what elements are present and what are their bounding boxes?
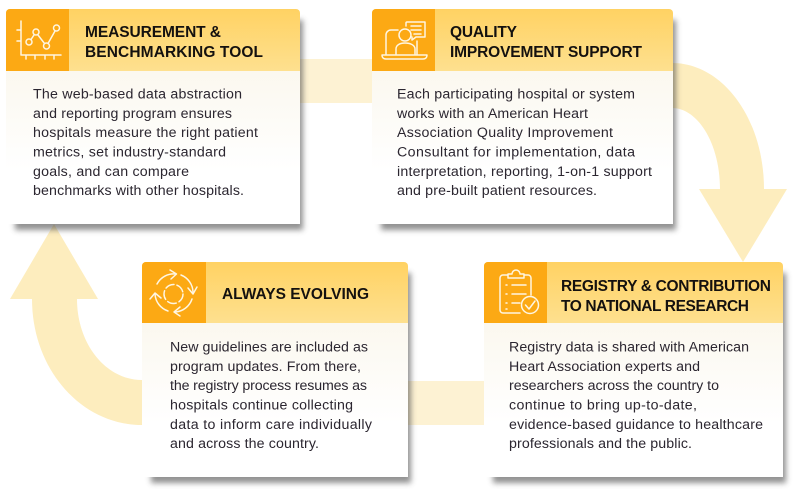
arrow: evolving to measurement <box>10 224 146 425</box>
body text: The web-based data abstraction <box>33 86 242 102</box>
panel: quality improvement support <box>372 9 676 230</box>
body text: benchmarks with other hospitals. <box>33 183 244 199</box>
body text: New guidelines are included as <box>170 340 368 356</box>
icon: line chart <box>6 9 69 71</box>
body text: metrics, set industry-standard <box>33 144 226 160</box>
body text: hospitals measure the right patient <box>33 125 258 141</box>
arrow: measurement to quality <box>295 59 375 103</box>
body text: Each participating hospital or system <box>397 86 635 102</box>
icon: circular arrows <box>142 262 206 323</box>
body text: and reporting program ensures <box>33 106 232 122</box>
header band <box>142 262 408 323</box>
heading: QUALITY <box>450 24 518 41</box>
body text: and pre-built patient resources. <box>397 183 597 199</box>
heading: TO NATIONAL RESEARCH <box>561 298 749 315</box>
body text: hospitals continue collecting <box>170 398 353 414</box>
body text: goals, and can compare <box>33 164 189 180</box>
body text: program updates. From there, <box>170 359 361 375</box>
header band <box>484 262 783 323</box>
body text: Association Quality Improvement <box>397 125 613 141</box>
heading: IMPROVEMENT SUPPORT <box>450 44 643 61</box>
panel: registry and contribution to national research <box>484 262 786 483</box>
body text: evidence-based guidance to healthcare <box>509 417 763 433</box>
body text: Consultant for implementation, data <box>397 144 635 160</box>
body text: works with an American Heart <box>396 106 588 122</box>
panel: always evolving <box>142 262 411 483</box>
arrow: registry to evolving <box>404 381 488 425</box>
body text: researchers across the country to <box>509 378 719 394</box>
icon: clipboard with check <box>484 262 547 323</box>
heading: MEASUREMENT & <box>85 24 221 41</box>
body text: Heart Association experts and <box>509 359 700 375</box>
arrow: quality to registry <box>668 63 787 262</box>
body text: Registry data is shared with American <box>509 340 749 356</box>
icon: consultant on laptop <box>372 9 435 71</box>
body text: continue to bring up-to-date, <box>509 398 697 414</box>
body text: the registry process resumes as <box>170 378 367 394</box>
heading: BENCHMARKING TOOL <box>85 44 263 61</box>
body text: and across the country. <box>170 436 319 452</box>
body text: professionals and the public. <box>509 436 692 452</box>
panel: measurement and benchmarking tool <box>6 9 303 230</box>
header band <box>6 9 300 71</box>
heading: ALWAYS EVOLVING <box>222 286 369 303</box>
body text: interpretation, reporting, 1-on-1 support <box>397 164 652 180</box>
heading: REGISTRY & CONTRIBUTION <box>561 278 771 295</box>
header band <box>372 9 673 71</box>
body text: data to inform care individually <box>170 417 373 433</box>
